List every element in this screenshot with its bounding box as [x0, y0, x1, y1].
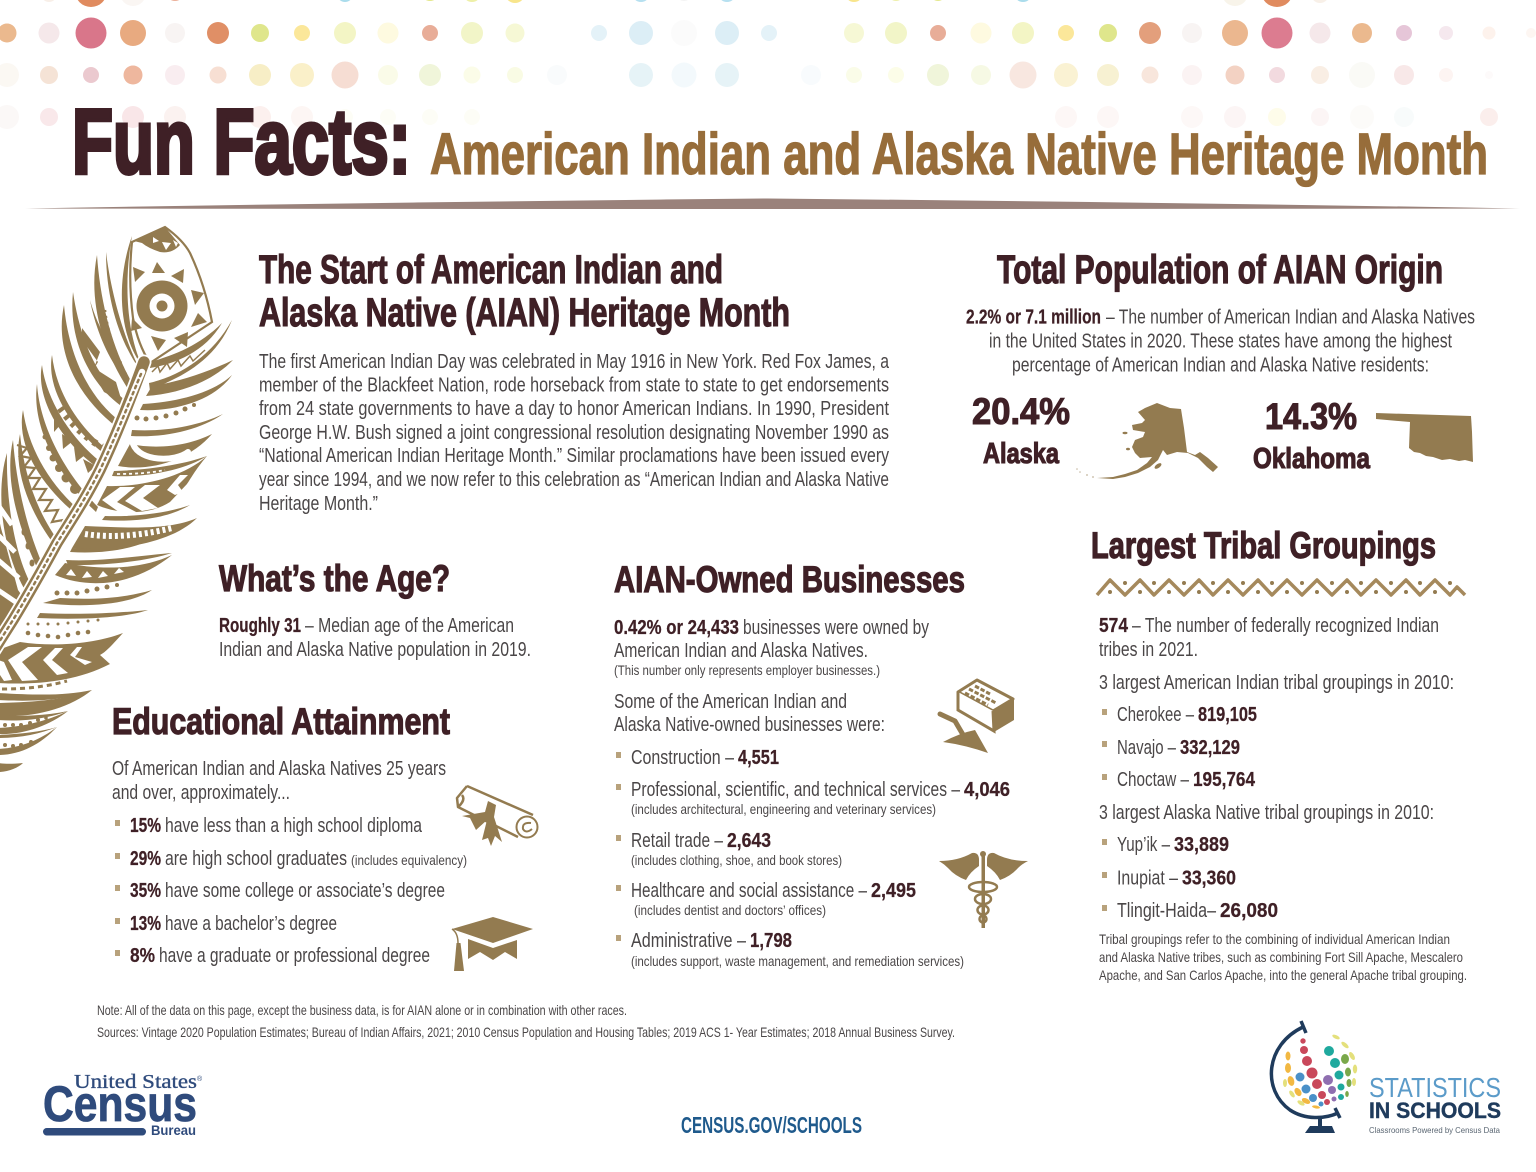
text block: education list [112, 758, 467, 967]
icon: brick and trowel [940, 680, 1014, 753]
text block: businesses: American Indian and Alaska Natives. [614, 640, 868, 662]
logo: United States Census Bureau: Census [43, 1076, 197, 1132]
header rule [25, 198, 1520, 209]
text block: tribal groupings: 332,129 [1180, 737, 1240, 759]
feather left barb patterns [0, 310, 128, 605]
text block: tribal groupings: – The number of federally recognized Indian [1132, 615, 1439, 637]
text block: businesses: 4,551 [738, 747, 779, 769]
text block: tribal groupings: Tlingit-Haida– [1117, 900, 1217, 922]
text block: businesses: (includes support, waste management, and remediation services) [631, 953, 964, 969]
icon: caduceus [939, 851, 1028, 928]
text block: businesses: Professional, scientific, and technical services – [631, 779, 961, 801]
text block: businesses: 2,643 [727, 830, 771, 852]
text block: businesses: 1,798 [750, 930, 792, 952]
text block: education list: have less than a high school diploma [165, 815, 423, 837]
text block: tribal groupings: and Alaska Native tribes, such as combining Fort Sill Apache, Mescalero [1099, 949, 1463, 965]
text block: education list: (includes equivalency) [351, 852, 467, 868]
text block: tribal groupings: Cherokee – [1117, 704, 1195, 726]
logo: Statistics in Schools wordmark: STATISTICS [1369, 1072, 1501, 1103]
stat: Oklahoma: 14.3% [1265, 396, 1357, 437]
text block: education list: have a graduate or professional degree [159, 945, 430, 967]
icon: feather [0, 227, 233, 772]
icon: Oklahoma map [1376, 413, 1473, 462]
text block: businesses: Alaska Native-owned businesses were: [614, 714, 885, 736]
text block: businesses: (includes clothing, shoe, and book stores) [631, 852, 842, 868]
text block: tribal groupings: 26,080 [1220, 900, 1278, 922]
text block: businesses: Administrative – [631, 930, 747, 952]
logo: United States Census Bureau: United States [74, 1071, 197, 1093]
text block: tribal groupings: 33,360 [1182, 868, 1236, 890]
text block: history paragraph [259, 351, 890, 515]
logo: United States Census Bureau: ® [197, 1075, 203, 1083]
text block: businesses: 0.42% or 24,433 [614, 617, 739, 639]
text block: education list: Of American Indian and Alaska Natives 25 years [112, 758, 446, 780]
stat: Alaska: 20.4% [972, 391, 1070, 432]
text block: businesses: businesses were owned by [743, 617, 929, 639]
text block: businesses: 2,495 [871, 880, 916, 902]
heading: what's the age: What’s the Age? [219, 558, 450, 599]
title: Fun Facts: [72, 91, 411, 193]
text block: businesses: Construction – [631, 747, 735, 769]
heading: start of heritage month: The Start of American Indian and [259, 248, 723, 292]
text block: businesses: Healthcare and social assistance – [631, 880, 868, 902]
stat: Oklahoma [1253, 396, 1371, 475]
text block: education list: and over, approximately... [112, 782, 290, 804]
text block: education list: 15% [130, 815, 161, 837]
text block: education list: 29% [130, 848, 161, 870]
heading: start of heritage month [259, 248, 790, 335]
text block: tribal groupings: 574 [1099, 615, 1129, 637]
header dot pattern [0, 0, 1536, 129]
text block: businesses: (includes architectural, engineering and veterinary services) [631, 801, 936, 817]
text block: history paragraph: George H.W. Bush signed a joint congressional resolution designating November 1990 as [259, 422, 889, 444]
text block: tribal groupings: Choctaw – [1117, 769, 1190, 791]
text block: businesses [614, 617, 1010, 969]
text block: education list: 13% [130, 913, 161, 935]
text block: population summary [966, 306, 1475, 376]
text block: education list: 8% [130, 945, 155, 967]
feather eye [130, 227, 212, 363]
text block: median age [219, 615, 531, 661]
text block: education list: 35% [130, 880, 161, 902]
heading: start of heritage month: Alaska Native (AIAN) Heritage Month [259, 291, 790, 335]
text block: education list: are high school graduates [165, 848, 347, 870]
feather left barbs [0, 236, 142, 640]
text block: tribal groupings: 3 largest American Indian tribal groupings in 2010: [1099, 672, 1454, 694]
note and sources: Note: All of the data on this page, except the business data, is for AIAN alone or in combination with other races. [97, 1002, 627, 1018]
feather right barbs [0, 320, 233, 772]
text block: tribal groupings: 33,889 [1174, 834, 1229, 856]
text block: businesses: Some of the American Indian and [614, 691, 847, 713]
text block: history paragraph: The first American Indian Day was celebrated in May 1916 in New York. Red Fox James, a [259, 351, 890, 373]
tribal zigzag divider [1097, 580, 1465, 595]
text block: businesses: (includes dentist and doctors’ offices) [634, 902, 826, 918]
heading: largest tribal groupings: Largest Tribal Groupings [1091, 525, 1436, 566]
logo: Statistics in Schools wordmark: IN SCHOOLS [1369, 1098, 1501, 1123]
logo: Statistics in Schools globe [1271, 1021, 1357, 1133]
text block: tribal groupings: 3 largest Alaska Native tribal groupings in 2010: [1099, 802, 1434, 824]
stat: Oklahoma: Oklahoma [1253, 443, 1371, 475]
heading: AIAN-owned businesses: AIAN-Owned Businesses [614, 559, 965, 600]
note and sources: Sources: Vintage 2020 Population Estimates; Bureau of Indian Affairs, 2021; 2010 Census Population and Housing Tables; 2019 ACS 1- Year Estimates; 2018 Annual Business Survey. [97, 1024, 955, 1040]
link: census.gov/schools: CENSUS.GOV/SCHOOLS [681, 1112, 862, 1138]
text block: population summary: 2.2% or 7.1 million [966, 306, 1101, 328]
text block: population summary: percentage of American Indian and Alaska Native residents: [1012, 354, 1429, 376]
logo: Statistics in Schools wordmark: Classrooms Powered by Census Data [1369, 1125, 1500, 1135]
text block: median age: – Median age of the American [305, 615, 514, 637]
text block: businesses: (This number only represents employer businesses.) [614, 662, 880, 678]
feather quill [0, 362, 144, 650]
text block: history paragraph: member of the Blackfeet Nation, rode horseback from state to state to get endorsements [259, 374, 889, 396]
text block: education list: have a bachelor’s degree [165, 913, 337, 935]
text block: education list: have some college or associate’s degree [165, 880, 445, 902]
text block: tribal groupings: Inupiat – [1117, 868, 1179, 890]
text block: history paragraph: Heritage Month.” [259, 493, 378, 515]
text block: tribal groupings: 195,764 [1193, 769, 1256, 791]
logo: Statistics in Schools wordmark [1369, 1072, 1501, 1135]
stat: Alaska [972, 391, 1070, 470]
note and sources [97, 1002, 955, 1040]
text block: tribal groupings [1099, 615, 1467, 983]
text block: history paragraph: year since 1994, and we now refer to this celebration as “American Indian and Alaska Native [259, 469, 889, 491]
icon: graduation cap [452, 917, 533, 971]
text block: history paragraph: from 24 state governments to have a day to honor American Indians. In 1990, President [259, 398, 889, 420]
text block: tribal groupings: Yup’ik – [1117, 834, 1171, 856]
stat: Alaska: Alaska [983, 438, 1060, 470]
text block: median age: Indian and Alaska Native population in 2019. [219, 639, 531, 661]
icon: Alaska map [1076, 403, 1218, 479]
heading: educational attainment: Educational Attainment [112, 701, 450, 742]
text block: tribal groupings: Tribal groupings refer to the combining of individual American Indian [1099, 931, 1450, 947]
title [72, 91, 1488, 193]
logo: United States Census Bureau: Bureau [151, 1122, 196, 1138]
text block: businesses: Retail trade – [631, 830, 724, 852]
text block: tribal groupings: tribes in 2021. [1099, 639, 1198, 661]
text block: tribal groupings: 819,105 [1198, 704, 1257, 726]
text block: businesses: 4,046 [964, 779, 1010, 801]
text block: median age: Roughly 31 [219, 615, 301, 637]
text block: tribal groupings: Navajo – [1117, 737, 1177, 759]
text block: history paragraph: “National American Indian Heritage Month.” Similar proclamations have been issued every [259, 445, 889, 467]
icon: diploma [457, 786, 538, 846]
